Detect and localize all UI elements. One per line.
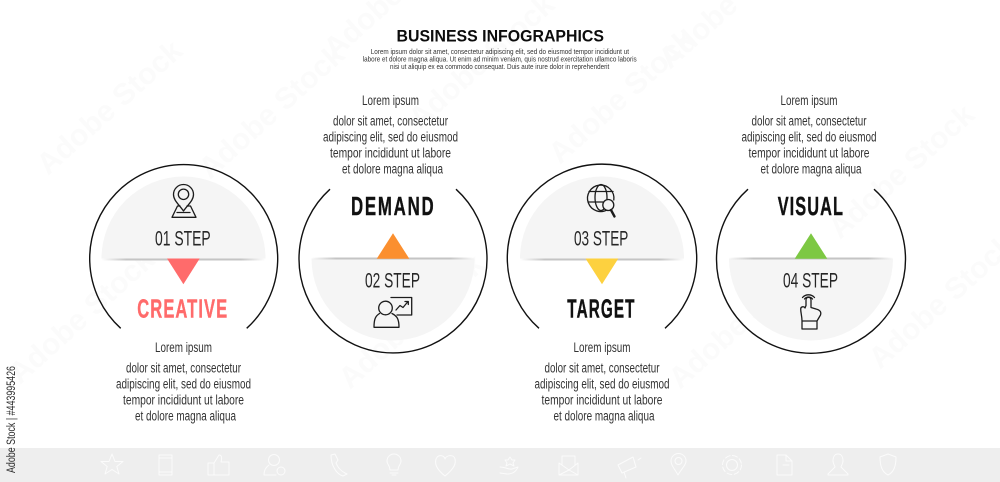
icon: shield: [880, 454, 896, 475]
description: et dolore magna aliqua: [554, 408, 655, 424]
icon: gear: [722, 456, 742, 474]
description: adipiscing elit, sed do eiusmod: [323, 130, 458, 144]
icon: phone: [331, 454, 347, 476]
description: [742, 93, 876, 176]
description: tempor incididunt ut labore: [330, 146, 451, 160]
description: Lorem ipsum: [155, 340, 212, 355]
icon: star: [101, 454, 123, 474]
icon: thumbs up: [208, 455, 229, 475]
ring: [90, 165, 278, 328]
subtitle text block: Lorem ipsum dolor sit amet, consectetur adipiscing elit, sed do eiusmod tempor incididunt ut: [371, 49, 629, 56]
description: adipiscing elit, sed do eiusmod: [534, 376, 670, 392]
half disc: [520, 176, 684, 258]
panel: step 2 demand: [299, 93, 487, 353]
triangle marker: [377, 233, 409, 259]
background watermark: Adobe Stock: [31, 34, 189, 181]
icon: document: [777, 455, 792, 475]
description: dolor sit amet, consectetur: [544, 360, 660, 376]
description: et dolore magna aliqua: [760, 162, 862, 176]
step label: 01 STEP: [155, 227, 211, 251]
subtitle text block: [363, 49, 637, 71]
heading: VISUAL: [778, 192, 844, 221]
ring: [507, 164, 697, 328]
description: adipiscing elit, sed do eiusmod: [116, 376, 251, 392]
step label: 03 STEP: [574, 227, 628, 251]
description: tempor incididunt ut labore: [123, 392, 244, 408]
icon: tablet: [159, 455, 172, 475]
icon: map pin: [671, 454, 686, 475]
icon: globe with magnifier: [588, 184, 614, 216]
description: tempor incididunt ut labore: [748, 146, 870, 160]
description: adipiscing elit, sed do eiusmod: [742, 130, 876, 144]
heading: TARGET: [567, 296, 636, 324]
background watermark: Adobe Stock: [3, 243, 161, 390]
background watermark: Adobe Stock: [193, 38, 351, 185]
description: Lorem ipsum: [574, 340, 630, 355]
icon: envelope: [559, 456, 578, 475]
icon: map pin: [172, 184, 196, 217]
heading: DEMAND: [351, 191, 435, 221]
background watermark: Adobe Stock: [823, 98, 981, 245]
side credit text: Adobe Stock | #443995426: [6, 366, 18, 473]
icon: presenter with chart: [374, 298, 412, 327]
panel: step 1 creative: [90, 165, 278, 424]
half disc: [729, 258, 893, 340]
panel: step 4 visual: [716, 93, 905, 353]
icon: heart: [436, 456, 455, 476]
description: tempor incididunt ut labore: [542, 392, 662, 408]
background watermark: Adobe Stock: [543, 23, 701, 170]
description: et dolore magna aliqua: [342, 162, 443, 176]
title: BUSINESS INFOGRAPHICS: [396, 27, 604, 46]
description: Lorem ipsum: [780, 93, 838, 108]
background watermark: Adobe Stock: [663, 248, 821, 395]
icon: hand with star: [500, 457, 518, 474]
icon: user check: [264, 454, 285, 475]
description: [116, 340, 251, 424]
ring: [716, 189, 905, 353]
half disc: [312, 258, 474, 340]
step label: 02 STEP: [365, 268, 420, 292]
panel: step 3 target: [507, 164, 697, 424]
bottom icon band: [0, 448, 1000, 482]
icon: light bulb: [387, 454, 401, 475]
description: dolor sit amet, consectetur: [752, 114, 867, 128]
description: Lorem ipsum: [362, 93, 419, 108]
subtitle text block: nisi ut aliquip ex ea commodo consequat. Duis aute irure dolor in reprehenderit: [390, 64, 609, 71]
description: dolor sit amet, consectetur: [126, 360, 241, 376]
subtitle text block: labore et dolore magna aliqua. Ut enim ad minim veniam, quis nostrud exercitation ullamco laboris: [363, 56, 637, 63]
triangle marker: [167, 258, 200, 284]
triangle marker: [586, 258, 618, 284]
triangle marker: [795, 233, 827, 259]
description: [534, 340, 670, 424]
icon: megaphone: [618, 457, 641, 478]
icon: tapping hand: [801, 295, 821, 329]
description: et dolore magna aliqua: [135, 408, 236, 424]
icon: person: [828, 454, 848, 475]
half disc: [102, 177, 266, 258]
background watermark: Adobe Stock: [333, 248, 491, 395]
step label: 04 STEP: [783, 268, 838, 292]
description: dolor sit amet, consectetur: [333, 114, 448, 128]
description: [323, 93, 458, 176]
heading: CREATIVE: [137, 295, 228, 324]
ring: [299, 189, 487, 353]
